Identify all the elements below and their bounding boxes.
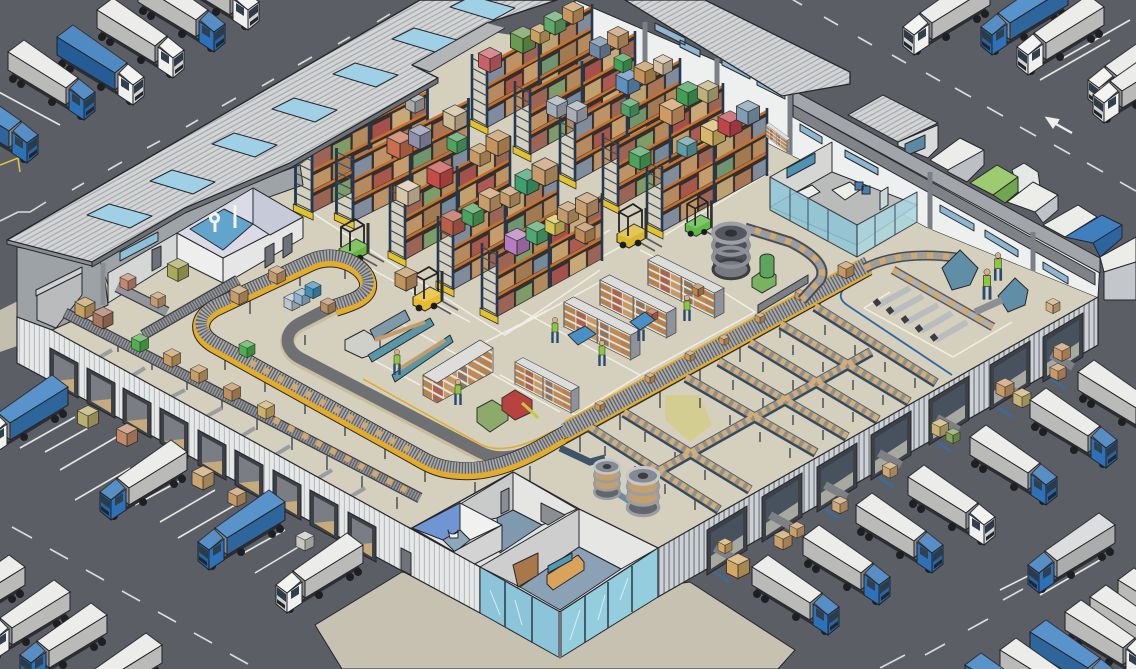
forklift yellow right xyxy=(617,204,662,251)
parked trucks top right xyxy=(903,0,1136,123)
rear wall with windows xyxy=(575,0,1100,298)
rack row: back U1 xyxy=(470,4,592,135)
corridor room xyxy=(462,472,577,553)
forklift yellow with load xyxy=(395,267,458,314)
rack row: R1 xyxy=(293,89,428,220)
rack row: U4 xyxy=(601,83,723,214)
reception room xyxy=(480,509,658,610)
spiral conveyor and feed xyxy=(713,224,822,313)
right dock doors xyxy=(707,313,1083,582)
boxes on left conveyor xyxy=(75,258,274,419)
rack row: R4 xyxy=(436,166,558,297)
blue totes xyxy=(284,281,321,311)
workers and carts xyxy=(455,253,1001,432)
right roof xyxy=(625,0,850,96)
rack row: R3 xyxy=(388,136,510,267)
parked trucks bottom left xyxy=(0,555,162,669)
boxes on yellow conveyor xyxy=(230,261,854,412)
glass storefront xyxy=(480,548,658,658)
floor markings xyxy=(300,172,1012,442)
parked trucks bottom right xyxy=(965,513,1136,669)
docked trucks left side xyxy=(0,375,363,613)
warehouse floor xyxy=(17,30,1098,548)
left wall conveyor xyxy=(65,280,420,509)
small annex building xyxy=(848,95,938,158)
docked trucks right side xyxy=(752,360,1136,635)
pallets outside left docks xyxy=(78,405,314,551)
amenities room xyxy=(108,188,303,303)
packing stations xyxy=(345,310,453,382)
main roof with skylights xyxy=(7,0,557,267)
rack row: R2 xyxy=(334,98,468,229)
parked trailers behind rear wall xyxy=(930,138,1136,300)
top goods on back racks xyxy=(478,1,760,170)
yellow main conveyor xyxy=(201,256,868,496)
forklift green right xyxy=(685,197,726,239)
bay under roof xyxy=(17,165,303,330)
rack row: U2 xyxy=(513,31,635,162)
left dock doors xyxy=(50,348,411,575)
concrete apron xyxy=(315,572,795,669)
restroom xyxy=(412,503,502,574)
parked trucks top left xyxy=(0,0,259,163)
front left wall xyxy=(17,317,480,613)
front office block xyxy=(412,472,658,612)
rack row: U3 xyxy=(558,58,680,189)
top goods on front racks xyxy=(387,93,598,256)
outbound sorter xyxy=(865,250,1060,340)
road arrow xyxy=(1047,118,1072,133)
spiral towers xyxy=(594,460,659,516)
rack row: U5 xyxy=(645,108,767,239)
glass control office xyxy=(770,142,917,257)
sortation branch conveyors xyxy=(560,306,936,510)
forklift green xyxy=(339,219,384,266)
shelving units xyxy=(423,255,724,414)
rear storage shelf xyxy=(766,123,790,153)
dock goods xyxy=(718,343,1070,579)
rack row: R5 xyxy=(480,193,602,324)
front right wall xyxy=(658,297,1098,597)
